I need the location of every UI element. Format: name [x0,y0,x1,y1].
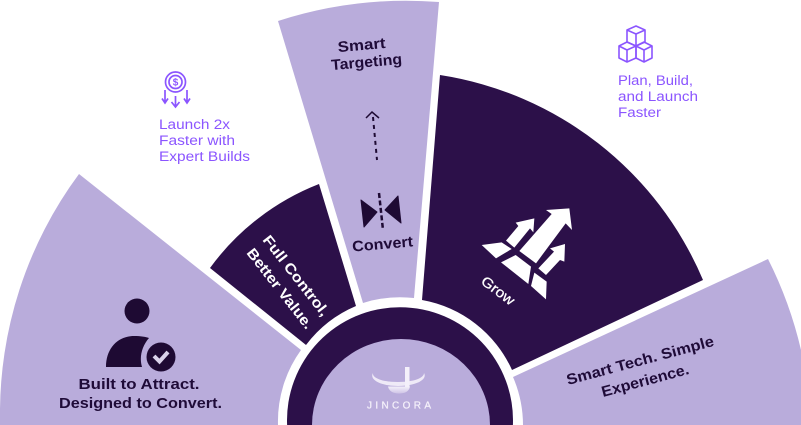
panel: built to attract [0,174,301,425]
panel: smart tech [513,259,801,425]
icon: coin with arrows: $ [173,78,179,88]
icon: rocket arrows [482,208,572,299]
text: better value: Better Value. [243,246,316,333]
panel: grow [422,75,703,370]
callout: plan build [618,26,698,120]
icon: jincora logo [372,367,425,394]
icon: convert [361,193,401,230]
text: faster: Faster [618,105,662,120]
text: plan build: Plan, Build, [618,73,693,88]
panel: smart targeting [278,1,439,303]
text: and launch: and Launch [618,89,698,104]
text: convert: Convert [351,233,414,256]
icon: person with check [106,298,176,372]
text: grow: Grow [478,273,519,309]
center hub [287,307,513,425]
text: jincora: JINCORA [367,400,431,412]
text: smart: Smart [337,35,386,56]
arrow: dotted up [366,112,379,160]
callout: launch faster [159,72,250,164]
text: built to attract: Built to Attract. [78,376,200,393]
text: experience: Experience. [600,361,691,401]
text: launch 2x: Launch 2x [159,117,230,132]
text: faster with: Faster with [159,133,235,148]
text: smart tech: Smart Tech. Simple [565,333,716,389]
icon: cubes [619,26,652,62]
text: full control: Full Control, [259,233,332,320]
text: targeting: Targeting [331,51,403,74]
panel: full control [210,184,356,345]
text: designed to convert: Designed to Convert. [59,395,222,412]
text: expert builds: Expert Builds [159,149,250,164]
